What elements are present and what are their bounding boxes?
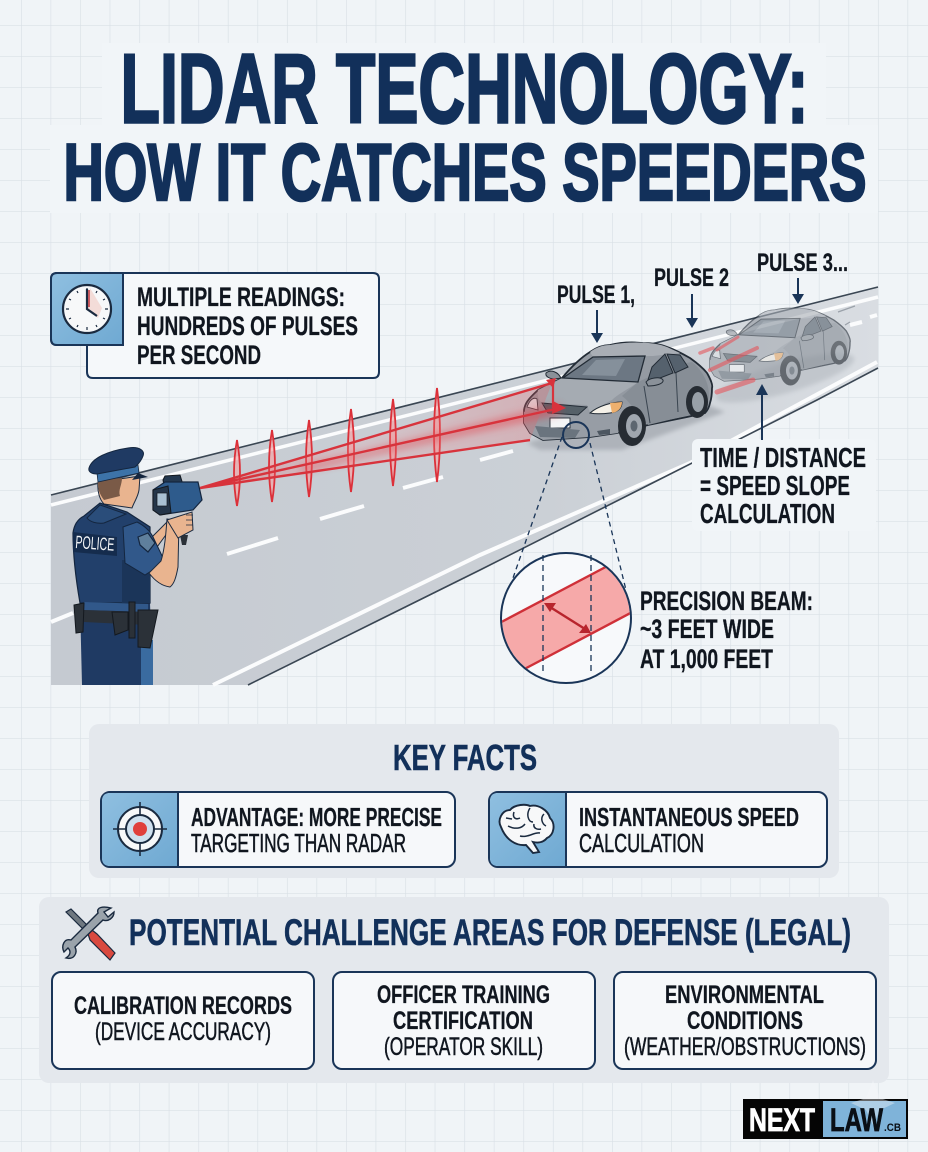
- icon panel: [51, 273, 123, 345]
- officer head: [98, 476, 140, 508]
- card: calibration records: [52, 972, 314, 1069]
- logo: next law: .CB: [884, 1122, 901, 1134]
- label: pulse 3: PULSE 3...: [757, 249, 848, 277]
- icon: crossed tools: [63, 907, 115, 960]
- duty belt: [74, 602, 158, 648]
- laser beam: [200, 378, 566, 488]
- officer hat: [89, 448, 148, 482]
- icon: brain: [500, 805, 554, 853]
- logo: next law: NEXT: [749, 1102, 815, 1138]
- label: time distance speed slope: TIME / DISTANCE: [700, 442, 866, 473]
- police officer with lidar gun: [73, 448, 202, 685]
- card: environmental conditions: [614, 972, 876, 1069]
- panel: potential challenge areas: [39, 897, 889, 1083]
- callout text: HUNDREDS OF PULSES: [137, 311, 358, 341]
- label: pulse 1: [557, 281, 635, 343]
- label: precision beam: AT 1,000 FEET: [640, 644, 773, 674]
- officer vest: [73, 503, 150, 603]
- card: calibration records: (DEVICE ACCURACY): [95, 1018, 271, 1046]
- fact card: instantaneous speed: [489, 792, 827, 867]
- card: environmental conditions: CONDITIONS: [687, 1007, 803, 1035]
- fact card: advantage: [101, 792, 455, 867]
- lidar device: [153, 475, 202, 545]
- label: precision beam: ~3 FEET WIDE: [640, 614, 774, 644]
- label: pulse 2: PULSE 2: [654, 264, 729, 292]
- shoulder patch: [138, 533, 155, 552]
- road scene: [51, 287, 878, 685]
- card: officer training: [333, 972, 595, 1069]
- fact card: instantaneous speed: CALCULATION: [579, 830, 704, 858]
- title: [64, 34, 866, 218]
- label: time distance speed slope: CALCULATION: [700, 498, 835, 529]
- red reflections near second car: [700, 337, 757, 392]
- logo: next law: [743, 1080, 908, 1139]
- label: pulse 2: [654, 264, 729, 328]
- second car position (pulse 3): [710, 306, 858, 412]
- officer forearm: [149, 519, 179, 587]
- officer far arm: [152, 522, 168, 547]
- logo: next law: LAW: [830, 1102, 884, 1138]
- vest label: [73, 532, 117, 556]
- callout: multiple readings: [51, 273, 379, 378]
- officer sleeve: [123, 522, 165, 575]
- icon: clock: [63, 285, 111, 333]
- card: officer training: (OPERATOR SKILL): [384, 1033, 543, 1061]
- officer hair: [98, 478, 122, 500]
- heading: key facts: KEY FACTS: [393, 737, 537, 778]
- label: time distance speed slope: = SPEED SLOPE: [700, 470, 850, 501]
- card: officer training: CERTIFICATION: [393, 1007, 533, 1035]
- callout text: MULTIPLE READINGS:: [137, 282, 345, 312]
- label: precision beam: [640, 586, 813, 674]
- card: officer training: OFFICER TRAINING: [377, 981, 550, 1009]
- fact card: advantage: TARGETING THAN RADAR: [191, 830, 406, 858]
- vest label: POLICE: [75, 532, 115, 555]
- label: precision beam: PRECISION BEAM:: [640, 586, 813, 616]
- fact card: advantage: ADVANTAGE: MORE PRECISE: [191, 804, 442, 832]
- label: time distance speed slope: [692, 384, 876, 531]
- precision beam magnifier: [500, 421, 632, 684]
- icon: target: [113, 802, 167, 856]
- card: environmental conditions: ENVIRONMENTAL: [665, 981, 824, 1009]
- first car position (pulse 1): [524, 342, 725, 450]
- panel: key facts: [89, 724, 839, 878]
- fact card: instantaneous speed: INSTANTANEOUS SPEED: [579, 804, 799, 832]
- label: pulse 3: [757, 249, 848, 304]
- callout text: PER SECOND: [137, 340, 261, 370]
- callout text: [137, 282, 358, 370]
- label: pulse 1: PULSE 1,: [557, 281, 635, 309]
- officer legs: [80, 603, 153, 685]
- laser pulse waves: [234, 388, 440, 506]
- vest collar: [87, 505, 126, 523]
- card: calibration records: CALIBRATION RECORDS: [74, 992, 292, 1020]
